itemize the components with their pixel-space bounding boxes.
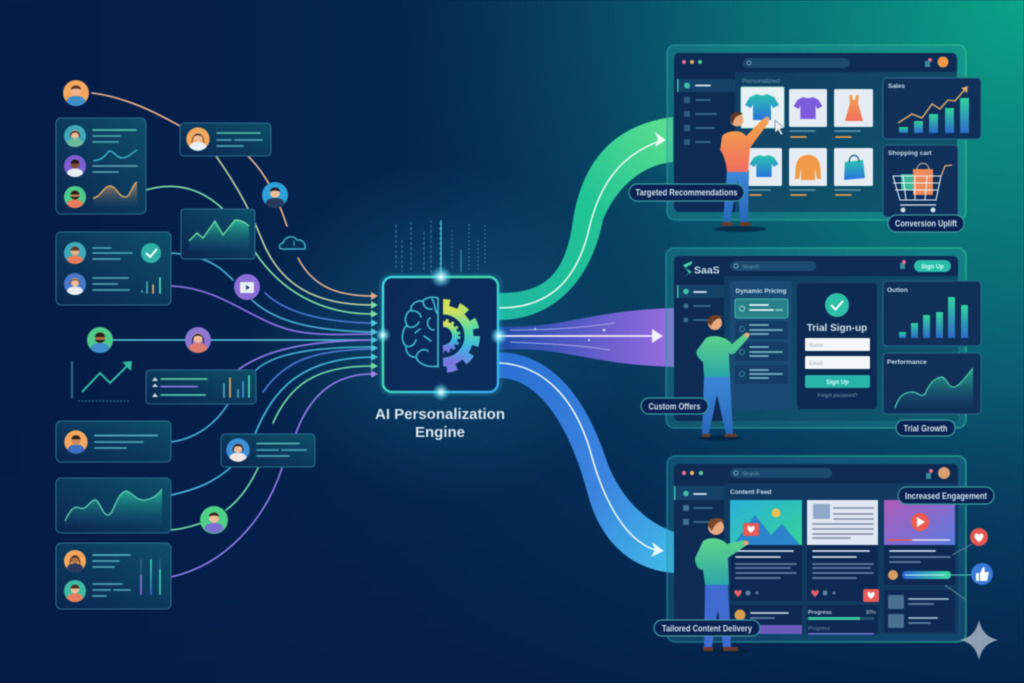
person: ecommerce: [714, 112, 770, 232]
label: custom offers: Custom Offers: [648, 402, 700, 412]
avatar: man in suit: [262, 182, 288, 208]
feed card 1: [730, 500, 802, 601]
panel: saas: [666, 248, 981, 428]
card: verified profiles: [56, 232, 171, 305]
label: tailored content delivery: [654, 620, 760, 636]
trial signup form: [797, 283, 877, 409]
label: trial growth: Trial Growth: [904, 424, 948, 434]
performance chart: Performance: [887, 359, 927, 366]
card: bars and metrics: [146, 370, 256, 404]
search and signup: Sign Up: [921, 264, 944, 270]
card: large area chart: [56, 478, 171, 533]
trial signup form: Trial Sign-up: [807, 323, 867, 334]
feed card 3: [884, 500, 955, 585]
panel: ecommerce: Personalized: [742, 78, 780, 85]
cursor: [775, 120, 784, 135]
card: profiles and trends: [56, 118, 146, 214]
output ribbon: blue: [499, 352, 674, 573]
trial signup form: Forgot password?: [817, 393, 858, 399]
saas logo: [683, 261, 720, 277]
card: people and vertical bars: [56, 543, 171, 609]
icon: brain: [402, 297, 438, 367]
browser chrome: [682, 56, 948, 68]
trend arrow chart: [72, 361, 132, 401]
sales chart card: [883, 78, 981, 139]
dynamic pricing panel: [730, 281, 792, 409]
progress card: [807, 605, 878, 634]
lower-left post: [730, 605, 802, 634]
person: saas: [696, 315, 750, 440]
card: area chart: [181, 209, 255, 259]
search and signup: Search: [742, 264, 759, 270]
dynamic pricing panel: Dynamic Pricing: [736, 288, 786, 295]
feed card 2: [807, 500, 879, 602]
output ribbon: green: [499, 117, 673, 320]
card: person summary: [56, 421, 171, 462]
trial signup form: Email: [809, 361, 823, 367]
sales chart card: Sales: [888, 83, 905, 90]
engine label: [375, 406, 505, 441]
outlon bar chart: Outlon: [887, 287, 908, 294]
label: conversion uplift: Conversion Uplift: [895, 218, 958, 230]
product grid: [741, 87, 873, 195]
data streams above engine: [396, 220, 485, 275]
card: person summary right: [221, 434, 315, 467]
label: targeted recommendations: Targeted Recommendations: [636, 188, 738, 198]
progress card: Progress: [808, 610, 832, 616]
panel: ecommerce: [667, 45, 981, 220]
trial signup form: Sign Up: [826, 380, 849, 386]
lower card with thumbnails: [884, 590, 955, 632]
input flow lines: [92, 93, 378, 577]
search and signup: [730, 260, 951, 272]
avatar: green circle: [200, 506, 228, 534]
label: increased engagement: Increased Engagement: [905, 491, 988, 502]
label: custom offers: [641, 398, 708, 414]
trial signup form: Name: [809, 343, 824, 349]
arrowheads: [371, 292, 378, 378]
saas logo: SaaS: [694, 264, 720, 276]
card: person summary top: [180, 123, 271, 156]
icon: video circle: [234, 274, 260, 300]
panel: content feed: Content Feed: [730, 489, 772, 496]
browser chrome: Search: [742, 472, 759, 478]
label: targeted recommendations: [629, 184, 744, 201]
label: conversion uplift: [888, 215, 964, 232]
person: content feed: [695, 518, 749, 654]
shopping cart card: Shopping cart: [888, 150, 933, 157]
top person avatar: [63, 80, 89, 106]
central engine: [375, 266, 508, 401]
sidebar: [677, 285, 724, 322]
outlon bar chart: [883, 281, 981, 346]
icon: heart reaction: [952, 528, 988, 555]
performance chart: [883, 353, 981, 414]
icon: cloud: [279, 237, 305, 249]
shopping cart card: [883, 145, 958, 217]
avatars on horizontal line: [87, 327, 211, 353]
progress card: 80%: [866, 610, 877, 616]
progress card: Progress: [808, 626, 830, 632]
panel: content feed: [667, 456, 966, 642]
watermark star: [960, 620, 998, 660]
engine label: AI Personalization: [375, 406, 505, 423]
output ribbon: purple: [499, 308, 674, 367]
label: increased engagement: [898, 487, 994, 504]
icon: gear: [442, 298, 481, 374]
browser chrome: [682, 467, 950, 479]
engine label: Engine: [415, 424, 465, 441]
label: tailored content delivery: Tailored Content Delivery: [662, 624, 753, 634]
icon: thumbs up: [945, 563, 993, 600]
sidebar: [674, 486, 724, 525]
label: trial growth: [896, 420, 955, 436]
sidebar: [677, 79, 735, 145]
